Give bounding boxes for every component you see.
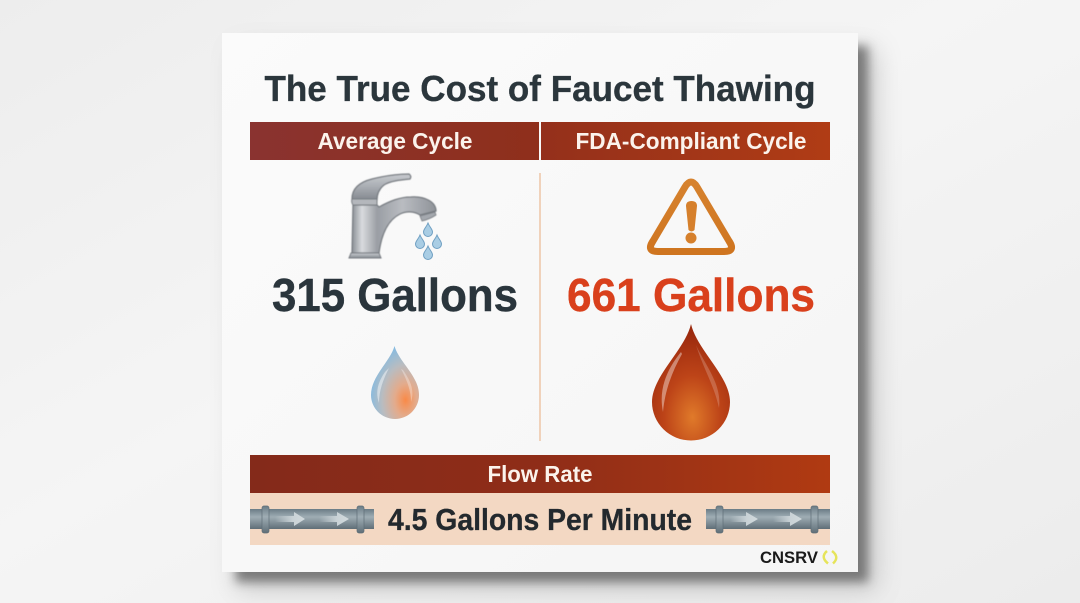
icon: large red drop [652, 324, 730, 440]
value: 661 gallons: 661 Gallons [567, 269, 815, 321]
icon: warning triangle [650, 182, 732, 252]
panel: card [222, 33, 858, 572]
panel: average cycle header [250, 122, 539, 160]
icon: faucet [349, 174, 436, 258]
logo: CNSRV: CNSRV [760, 548, 819, 567]
card shadow [236, 46, 876, 590]
icon: right pipe [706, 506, 830, 533]
icon: water droplets [416, 223, 442, 260]
title: The True Cost of Faucet Thawing [264, 68, 816, 109]
icon: left pipe [250, 506, 374, 533]
panel: flow rate value band: 4.5 Gallons Per Minute [388, 502, 692, 537]
panel: flow rate value band [250, 493, 830, 545]
panel: flow rate header: Flow Rate [488, 461, 592, 487]
column divider [539, 173, 541, 441]
value: 315 gallons: 315 Gallons [272, 269, 518, 321]
icon: small blended drop [371, 346, 419, 419]
panel: FDA-compliant cycle header: FDA-Compliant Cycle [576, 128, 806, 154]
panel: average cycle header: Average Cycle [318, 128, 472, 154]
panel: flow rate header [250, 455, 830, 493]
panel: FDA-compliant cycle header [541, 122, 830, 160]
